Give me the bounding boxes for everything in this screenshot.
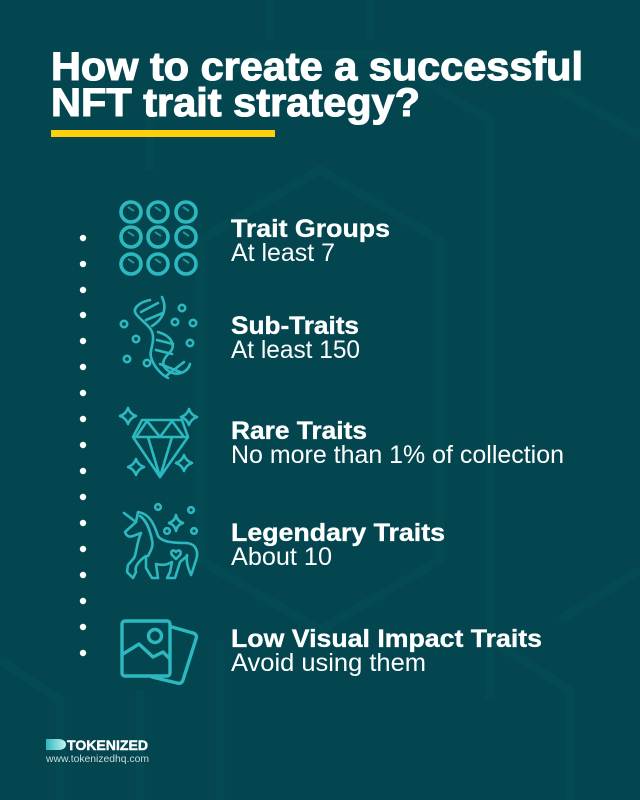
text: At least 150: At least 150: [231, 336, 360, 364]
icon: image cards: [122, 621, 196, 683]
title: NFT trait strategy?: [51, 81, 420, 125]
text: About 10: About 10: [231, 543, 332, 571]
heading: Rare Traits: Rare Traits: [231, 417, 367, 445]
heading: Low Visual Impact Traits: Low Visual Impact Traits: [231, 625, 542, 653]
website url: www.tokenizedhq.com: [45, 753, 149, 765]
text: Avoid using them: Avoid using them: [231, 649, 426, 677]
title underline: [51, 130, 275, 137]
heading: Sub-Traits: Sub-Traits: [231, 312, 359, 340]
text: No more than 1% of collection: No more than 1% of collection: [231, 441, 564, 469]
title: How to create a successful: [51, 45, 583, 89]
heading: Legendary Traits: Legendary Traits: [231, 519, 445, 547]
icon: DNA helix: [121, 297, 196, 378]
logo: Tokenized: TOKENIZED: [67, 738, 148, 753]
dotted vertical line: [80, 235, 86, 656]
heading: Trait Groups: Trait Groups: [231, 215, 390, 243]
icon: unicorn: [124, 504, 197, 578]
icon: diamond: [120, 408, 197, 477]
text: At least 7: At least 7: [231, 239, 335, 267]
title: [51, 45, 583, 125]
icon: trait groups circle grid: [121, 202, 196, 274]
